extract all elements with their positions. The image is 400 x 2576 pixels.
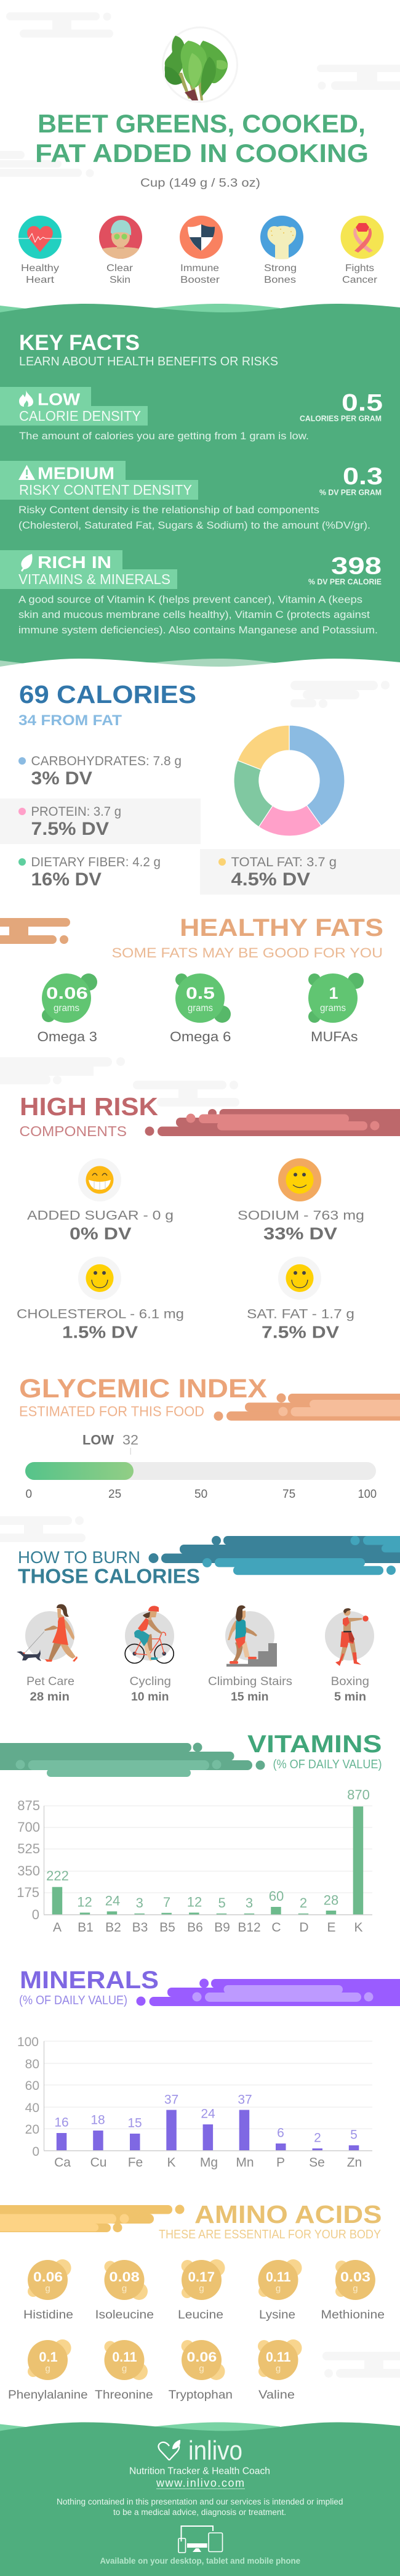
heading: HOW TO BURN <box>18 1548 140 1567</box>
fact: medium risky content density <box>0 461 383 531</box>
amino: valine: g <box>276 2363 281 2374</box>
risk item: sodium <box>238 1158 364 1243</box>
icon: clear skin <box>99 216 142 259</box>
bar chart: minerals: 5 <box>350 2128 358 2142</box>
bar chart: vitamins: 870 <box>347 1787 370 1803</box>
fact: low calorie density: CALORIES PER GRAM <box>300 415 382 423</box>
panel: calories <box>0 680 400 895</box>
bar chart: minerals: Mg <box>200 2156 218 2170</box>
legend: total fat <box>200 849 400 895</box>
marker label: low 32: 32 <box>122 1432 138 1448</box>
activity: boxing <box>325 1608 374 1666</box>
gauge scale: 100 <box>358 1488 377 1501</box>
description: Risky Content density is the relationship of bad components <box>18 505 319 516</box>
marker label: low 32 <box>82 1432 138 1455</box>
label: boxing 5 min <box>331 1675 369 1704</box>
bar chart: vitamins: A <box>53 1920 62 1935</box>
bar chart: vitamins <box>17 1787 372 1935</box>
fact: low calorie density <box>0 387 383 442</box>
title: BEET GREENS, COOKED, <box>38 109 366 138</box>
risk item: sodium: 33% DV <box>263 1224 337 1243</box>
amino: methionine: Methionine <box>321 2309 385 2322</box>
bar chart: minerals: 24 <box>201 2107 215 2121</box>
label: clear skin: Skin <box>110 275 130 285</box>
heading: THOSE CALORIES <box>18 1564 200 1587</box>
bar chart: vitamins: 222 <box>46 1868 69 1883</box>
label: pet care 28 min: 28 min <box>30 1691 70 1704</box>
label: immune booster <box>180 263 220 285</box>
legend: carbohydrates: 3% DV <box>31 768 92 789</box>
subheading: ESTIMATED FOR THIS FOOD <box>19 1404 204 1420</box>
panel: vitamins <box>0 1731 382 1935</box>
header brush <box>0 1742 265 1777</box>
subheading: LEARN ABOUT HEALTH BENEFITS OR RISKS <box>19 355 278 368</box>
bar chart: vitamins: K <box>354 1920 363 1935</box>
bar chart: vitamins: B1 <box>78 1920 94 1935</box>
fact: medium risky content density: RISKY CONTENT DENSITY <box>19 482 192 498</box>
panel: amino acids <box>0 2200 385 2402</box>
bar chart: minerals: 6 <box>277 2126 284 2140</box>
food image: beet greens <box>162 27 238 102</box>
label: healthy heart: Healthy <box>21 263 59 274</box>
amino: tryptophan: g <box>199 2363 204 2374</box>
description: immune system deficiencies). Also contains Manganese and Potassium. <box>18 625 378 636</box>
bar chart: vitamins: 3 <box>136 1895 143 1911</box>
panel: how to burn those calories <box>17 1536 400 1704</box>
amino: histidine <box>23 2259 73 2322</box>
amino: leucine: g <box>199 2283 204 2294</box>
disclaimer: Nothing contained in this presentation and our services is intended or implied <box>57 2497 343 2506</box>
label: clear skin <box>106 263 133 285</box>
bar chart: vitamins: 2 <box>300 1895 307 1911</box>
risk item: cholesterol: CHOLESTEROL - 6.1 mg <box>17 1307 184 1322</box>
website link: www.inlivo.com <box>156 2477 244 2489</box>
amino: methionine: 0.03 <box>340 2269 370 2285</box>
amino: phenylalanine: 0.1 <box>39 2349 58 2365</box>
risk item: saturated fat: SAT. FAT - 1.7 g <box>247 1307 354 1322</box>
gauge scale: 50 <box>194 1488 207 1501</box>
panel: glycemic index <box>19 1374 400 1501</box>
metric: omega 3 <box>37 973 97 1044</box>
metric: omega 6 <box>170 973 231 1044</box>
panel: key facts <box>0 304 400 678</box>
bar chart: vitamins: E <box>327 1920 336 1935</box>
heading: key facts: KEY FACTS <box>19 331 140 355</box>
bar chart: minerals: 37 <box>164 2093 178 2107</box>
description: A good source of Vitamin K (helps prevent cancer), Vitamin A (keeps <box>18 594 362 605</box>
bar chart: vitamins: B6 <box>187 1920 203 1935</box>
amino: threonine: 0.11 <box>112 2349 137 2365</box>
bar chart: minerals: 18 <box>90 2113 105 2127</box>
rating: medium: MEDIUM <box>38 463 114 483</box>
fact: medium risky content density: % DV PER GRAM <box>319 488 382 497</box>
icon: fights cancer <box>341 216 384 259</box>
amino: isoleucine <box>95 2260 154 2322</box>
legend: protein: 7.5% DV <box>31 819 109 839</box>
label: cycling 10 min: 10 min <box>131 1691 169 1704</box>
bar chart: vitamins: 875 <box>17 1798 40 1813</box>
bar chart: vitamins: 350 <box>17 1863 40 1879</box>
heading: healthy fats: HEALTHY FATS <box>180 914 383 941</box>
bar chart: vitamins: B2 <box>105 1920 121 1935</box>
bar chart: vitamins: 525 <box>17 1841 40 1856</box>
heading: vitamins: VITAMINS <box>247 1731 382 1758</box>
fact: low calorie density: CALORIE DENSITY <box>19 408 141 424</box>
amino: leucine: Leucine <box>178 2309 223 2322</box>
bar chart: minerals: Fe <box>128 2156 143 2170</box>
legend: total fat: 4.5% DV <box>231 869 310 890</box>
amino: histidine: Histidine <box>23 2309 73 2322</box>
value: 0.3 % DV per gram: 0.3 <box>343 463 383 490</box>
amino: methionine <box>321 2260 385 2322</box>
value: 0.5 calories per gram: 0.5 <box>342 389 383 416</box>
bar chart: vitamins: 700 <box>17 1819 40 1835</box>
bar chart: vitamins: 5 <box>218 1895 226 1911</box>
bar chart: vitamins: B3 <box>132 1920 148 1935</box>
bar chart: vitamins: 28 <box>324 1893 338 1908</box>
panel: high risk components <box>17 1092 400 1341</box>
icon: strong bones <box>260 216 303 259</box>
bar chart: minerals: 37 <box>238 2093 252 2107</box>
bar chart: minerals <box>17 2035 372 2170</box>
risk item: sodium: SODIUM - 763 mg <box>238 1209 364 1223</box>
label: climbing stairs 15 min <box>208 1675 292 1704</box>
bar chart: vitamins: B12 <box>238 1920 261 1935</box>
bar chart: minerals: 16 <box>54 2116 69 2130</box>
metric: omega 6: 0.5 <box>186 984 215 1002</box>
label: immune booster: Booster <box>180 275 220 285</box>
amino: tryptophan <box>169 2340 233 2402</box>
amino: lysine: g <box>276 2283 281 2294</box>
activity: climbing stairs <box>225 1606 277 1667</box>
gauge scale: 75 <box>282 1488 295 1501</box>
fact: rich in vitamins and minerals: VITAMINS & MINERALS <box>18 571 170 587</box>
bar chart: minerals: 40 <box>25 2101 39 2115</box>
title: FAT ADDED IN COOKING <box>35 139 369 168</box>
activity: pet care <box>17 1604 78 1662</box>
risk item: added sugar: ADDED SUGAR - 0 g <box>27 1209 174 1223</box>
bar chart: vitamins: B5 <box>159 1920 175 1935</box>
label: fights cancer: Fights <box>345 263 374 274</box>
risk item: added sugar: 0% DV <box>70 1224 132 1243</box>
icon: healthy heart <box>18 216 62 259</box>
title <box>35 109 369 168</box>
amino: methionine: g <box>353 2283 358 2294</box>
label: strong bones: Strong <box>264 263 297 274</box>
amino: lysine <box>258 2259 302 2322</box>
bar chart: minerals: 80 <box>25 2057 39 2071</box>
bar chart: vitamins: 12 <box>77 1894 92 1909</box>
value: 398 % DV per calorie: 398 <box>331 553 382 580</box>
amino: threonine <box>95 2340 153 2402</box>
legend: dietary fiber: DIETARY FIBER: 4.2 g <box>31 855 161 869</box>
header brush <box>145 1109 400 1136</box>
subheading: (% OF DAILY VALUE) <box>273 1758 382 1771</box>
subheading: 34 from fat: 34 FROM FAT <box>18 712 122 729</box>
bar chart: minerals: Zn <box>347 2156 362 2170</box>
rating: low: LOW <box>38 390 81 409</box>
gauge scale: 25 <box>108 1488 121 1501</box>
label: pet care 28 min: Pet Care <box>26 1675 74 1688</box>
description <box>18 594 378 636</box>
gauge bar <box>25 1462 376 1480</box>
logo: inlivo <box>159 2436 242 2466</box>
metric: MUFAs: MUFAs <box>311 1029 358 1044</box>
metric: omega 3: Omega 3 <box>37 1029 97 1044</box>
header brush <box>214 1394 400 1421</box>
risk item: added sugar <box>27 1158 174 1243</box>
description: (Cholesterol, Saturated Fat, Sugars & Sodium) to the amount (%DV/gr). <box>18 520 370 531</box>
risk item: saturated fat: 7.5% DV <box>262 1322 339 1341</box>
amino: tryptophan: Tryptophan <box>169 2389 233 2402</box>
metric: omega 3: 0.06 <box>46 984 88 1002</box>
bar chart: vitamins: 60 <box>269 1888 284 1904</box>
icon: flame <box>19 390 33 407</box>
label: pet care 28 min <box>26 1675 74 1704</box>
bar chart: minerals: Ca <box>54 2156 71 2170</box>
heading: 69 calories: 69 CALORIES <box>19 680 196 709</box>
amino: phenylalanine: g <box>45 2363 50 2374</box>
description: The amount of calories you are getting from 1 gram is low. <box>19 431 309 442</box>
logo: inlivo: inlivo <box>188 2436 242 2466</box>
serving size: Cup (149 g / 5.3 oz) <box>140 177 260 190</box>
risk item: cholesterol: 1.5% DV <box>62 1322 138 1341</box>
label: strong bones <box>264 263 297 285</box>
risk item: saturated fat <box>247 1257 354 1341</box>
bar chart: vitamins: 3 <box>246 1895 253 1911</box>
icon: leaf <box>21 554 32 572</box>
label: clear skin: Clear <box>106 263 133 274</box>
availability note: Available on your desktop, tablet and mobile phone <box>100 2556 300 2566</box>
bar chart: vitamins: 0 <box>32 1907 39 1922</box>
bar chart: vitamins: 7 <box>163 1895 170 1910</box>
legend: protein <box>0 798 201 844</box>
label: fights cancer: Cancer <box>342 275 377 285</box>
bar chart: minerals: K <box>167 2156 176 2170</box>
label: immune booster: Immune <box>180 263 219 274</box>
legend: dietary fiber <box>18 855 161 890</box>
description: skin and mucous membrane cells healthy), Vitamin C (protects against <box>18 609 370 620</box>
metric: MUFAs <box>308 973 364 1044</box>
bar chart: minerals: 60 <box>25 2079 39 2093</box>
bar chart: minerals: 2 <box>314 2131 321 2145</box>
description <box>18 505 370 531</box>
bar chart: vitamins: 175 <box>17 1885 39 1900</box>
heading: high risk: HIGH RISK <box>20 1092 158 1121</box>
amino: phenylalanine <box>8 2339 88 2402</box>
header brush <box>0 2204 185 2232</box>
footer <box>0 2423 400 2576</box>
legend: dietary fiber: 16% DV <box>31 869 102 890</box>
icon: warning triangle <box>18 465 35 480</box>
amino: threonine: g <box>122 2363 127 2374</box>
marker label: low 32: LOW <box>82 1432 114 1448</box>
label: healthy heart <box>21 263 59 285</box>
gauge scale <box>26 1488 377 1501</box>
panel: healthy fats <box>0 914 383 1044</box>
label: strong bones: Bones <box>264 275 296 285</box>
tagline: Nutrition Tracker & Health Coach <box>129 2466 270 2477</box>
health benefits row <box>18 216 384 285</box>
metric: MUFAs: grams <box>320 1003 346 1014</box>
donut chart <box>234 725 345 836</box>
amino: threonine: Threonine <box>95 2389 153 2402</box>
metric: omega 6: grams <box>188 1003 213 1014</box>
amino: phenylalanine: Phenylalanine <box>8 2389 88 2402</box>
amino: leucine <box>178 2259 225 2322</box>
label: cycling 10 min <box>129 1675 171 1704</box>
heading: glycemic index: GLYCEMIC INDEX <box>19 1374 267 1404</box>
subheading: SOME FATS MAY BE GOOD FOR YOU <box>112 945 383 961</box>
bar chart: minerals: 20 <box>25 2123 39 2137</box>
bar chart: minerals: Se <box>309 2156 325 2170</box>
label: climbing stairs 15 min: 15 min <box>231 1691 268 1704</box>
fact: rich in vitamins and minerals: % DV PER CALORIE <box>308 578 382 587</box>
amino: lysine: Lysine <box>259 2309 295 2322</box>
legend: protein: PROTEIN: 3.7 g <box>31 805 121 819</box>
bar chart: vitamins: 12 <box>187 1894 202 1909</box>
amino: isoleucine: 0.08 <box>109 2269 140 2285</box>
amino: valine: Valine <box>258 2389 295 2402</box>
legend: total fat: TOTAL FAT: 3.7 g <box>231 855 337 869</box>
panel: minerals <box>17 1967 400 2170</box>
bar chart: minerals: 100 <box>17 2035 39 2049</box>
amino: histidine: 0.06 <box>33 2269 63 2285</box>
bar chart: vitamins: C <box>271 1920 281 1935</box>
amino: tryptophan: 0.06 <box>186 2349 217 2365</box>
metric: MUFAs: 1 <box>329 984 338 1002</box>
legend: carbohydrates: CARBOHYDRATES: 7.8 g <box>31 754 182 768</box>
bar chart: minerals: Mn <box>236 2156 254 2170</box>
amino: valine <box>258 2339 302 2402</box>
activity: cycling <box>125 1606 174 1664</box>
amino: isoleucine: g <box>122 2283 127 2294</box>
bar chart: vitamins: B9 <box>214 1920 230 1935</box>
disclaimer <box>57 2497 343 2517</box>
legend: carbohydrates <box>18 754 182 789</box>
header brush <box>149 1536 400 1575</box>
risk item: cholesterol <box>17 1257 184 1341</box>
bar chart: vitamins: D <box>299 1920 309 1935</box>
label: healthy heart: Heart <box>26 275 55 285</box>
subheading: THESE ARE ESSENTIAL FOR YOUR BODY <box>159 2228 381 2241</box>
amino: leucine: 0.17 <box>188 2269 215 2285</box>
heading: amino acids: AMINO ACIDS <box>194 2200 382 2229</box>
amino: lysine: 0.11 <box>266 2269 290 2285</box>
amino: histidine: g <box>45 2283 50 2294</box>
fact: rich in vitamins and minerals <box>0 550 382 636</box>
heading: minerals: MINERALS <box>20 1967 159 1994</box>
bar chart: minerals: Cu <box>90 2156 106 2170</box>
bar chart: minerals: 0 <box>32 2145 39 2159</box>
heading <box>18 1548 200 1587</box>
label: cycling 10 min: Cycling <box>129 1675 171 1688</box>
amino: valine: 0.11 <box>266 2349 290 2365</box>
subheading: (% OF DAILY VALUE) <box>19 1994 127 2007</box>
rating: rich in: RICH IN <box>38 553 111 572</box>
icon: devices <box>178 2526 223 2553</box>
gauge scale: 0 <box>26 1488 32 1501</box>
label: boxing 5 min: Boxing <box>331 1675 369 1688</box>
label: fights cancer <box>342 263 377 285</box>
icon: immune booster <box>180 216 223 259</box>
label: climbing stairs 15 min: Climbing Stairs <box>208 1675 292 1688</box>
subheading: components: COMPONENTS <box>20 1123 127 1139</box>
label: boxing 5 min: 5 min <box>334 1691 366 1704</box>
disclaimer: to be a medical advice, diagnosis or treatment. <box>113 2508 286 2517</box>
bar chart: minerals: P <box>276 2156 285 2170</box>
bar chart: vitamins: 24 <box>105 1893 120 1908</box>
amino: isoleucine: Isoleucine <box>95 2309 154 2322</box>
header brush <box>137 1979 400 2006</box>
metric: omega 3: grams <box>54 1003 79 1014</box>
metric: omega 6: Omega 6 <box>170 1029 231 1044</box>
header brush <box>0 918 70 944</box>
bar chart: minerals: 15 <box>127 2116 142 2131</box>
